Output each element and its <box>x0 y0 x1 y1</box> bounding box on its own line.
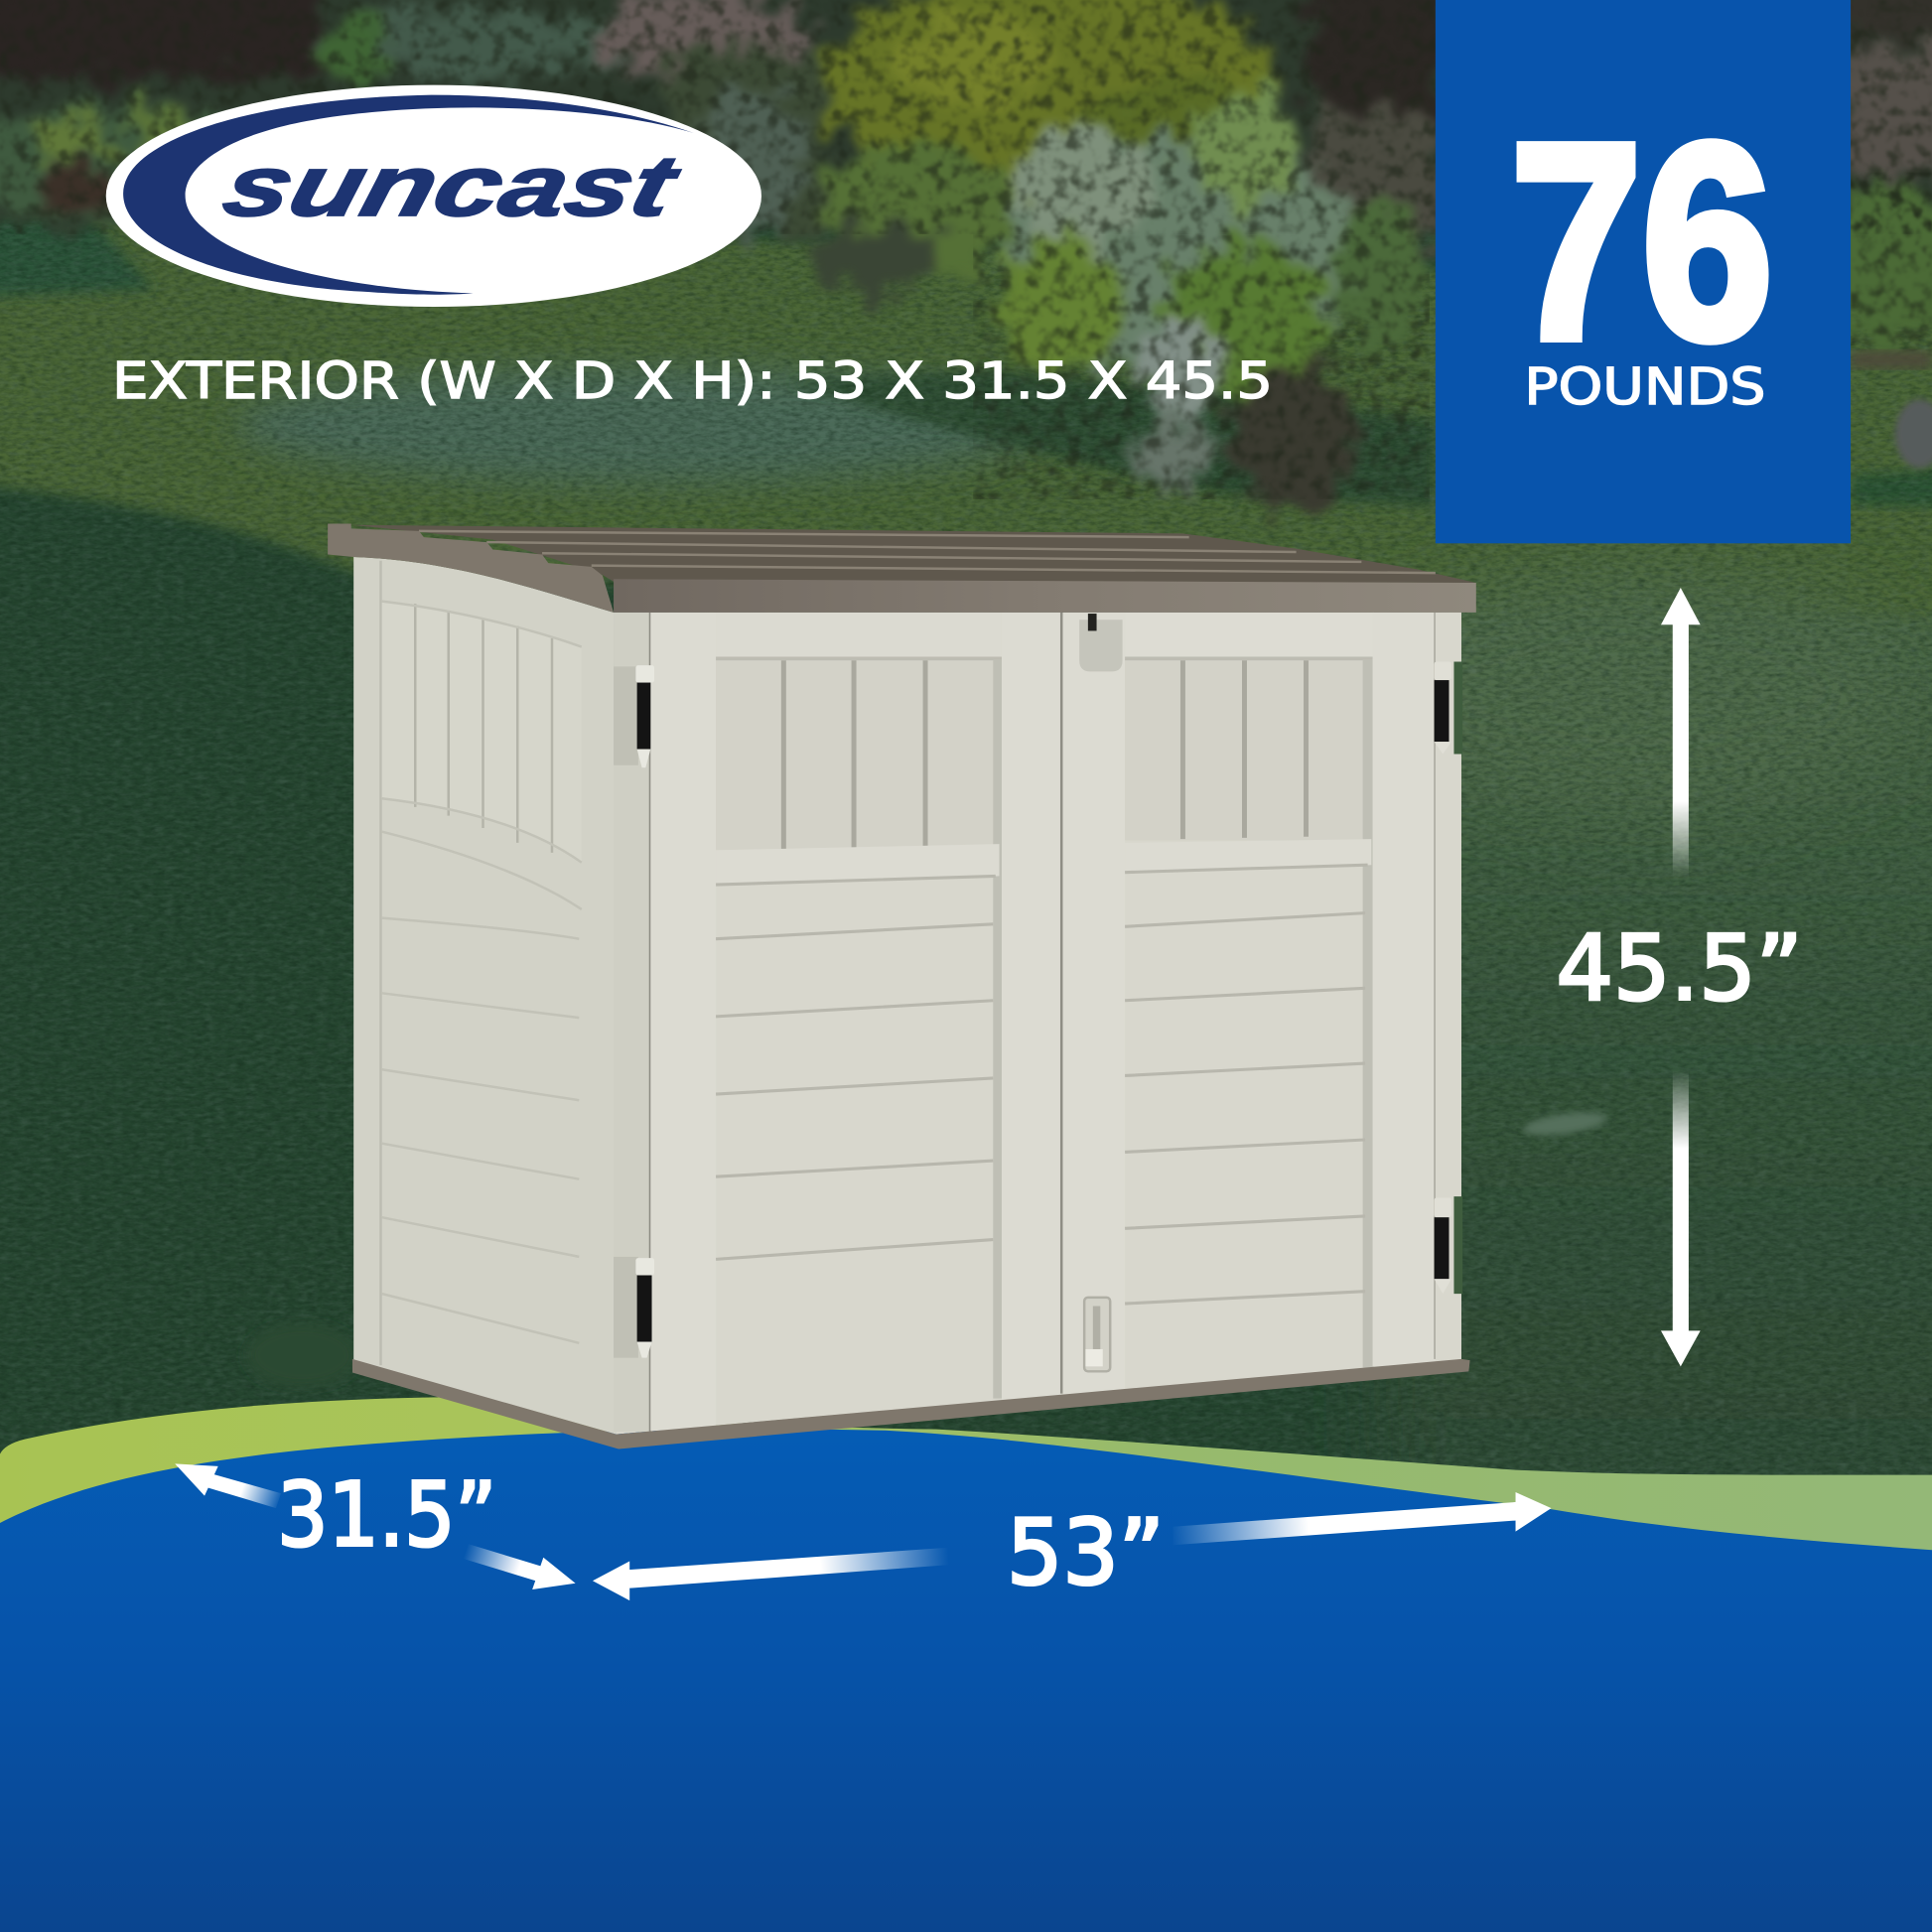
height label: 45.5” <box>1556 917 1803 1022</box>
lawn stone <box>1522 1108 1607 1140</box>
logo: suncast <box>106 85 761 307</box>
shed base <box>352 1359 1470 1449</box>
shed side wall <box>353 557 617 1435</box>
height arrow <box>1556 588 1803 1366</box>
exterior dimensions text: EXTERIOR (W X D X H): 53 X 31.5 X 45.5 <box>112 351 1273 410</box>
corner post <box>614 613 650 1432</box>
left top hinge <box>635 665 654 767</box>
depth arrow <box>175 1463 576 1589</box>
top latch <box>1079 614 1123 671</box>
depth arrow right <box>464 1544 576 1589</box>
logo swoosh <box>123 95 694 295</box>
upper arrow <box>1661 588 1701 878</box>
width arrow left <box>593 1548 950 1600</box>
right top hinge <box>1435 661 1451 755</box>
roof top <box>351 525 1476 583</box>
depth label: 31.5” <box>277 1463 496 1567</box>
foliage <box>0 0 1932 511</box>
weight number: 76 <box>1511 86 1773 397</box>
door gap <box>1060 613 1062 1394</box>
width arrow <box>593 1492 1552 1605</box>
blue footer band <box>0 1429 1932 1932</box>
width label: 53” <box>1007 1501 1165 1605</box>
left door <box>650 613 1061 1431</box>
panel: weight badge <box>1436 0 1851 543</box>
roof front fascia <box>614 579 1476 613</box>
left bottom hinge <box>635 1258 654 1358</box>
shed illustration <box>328 523 1476 1449</box>
leaf on lawn <box>246 1323 357 1387</box>
right door <box>1063 613 1461 1396</box>
right notches <box>1453 661 1462 1294</box>
roof side fascia <box>328 523 614 613</box>
green wave <box>0 1397 1932 1565</box>
right bottom hinge <box>1435 1197 1451 1294</box>
bottom handle <box>1084 1298 1110 1371</box>
lower arrow <box>1661 1069 1701 1366</box>
logo wordmark: suncast <box>214 137 690 234</box>
shed front <box>614 613 1461 1435</box>
rock <box>1895 399 1932 469</box>
depth arrow left <box>175 1463 281 1508</box>
weight unit: POUNDS <box>1524 357 1765 416</box>
width arrow right <box>1173 1492 1552 1545</box>
